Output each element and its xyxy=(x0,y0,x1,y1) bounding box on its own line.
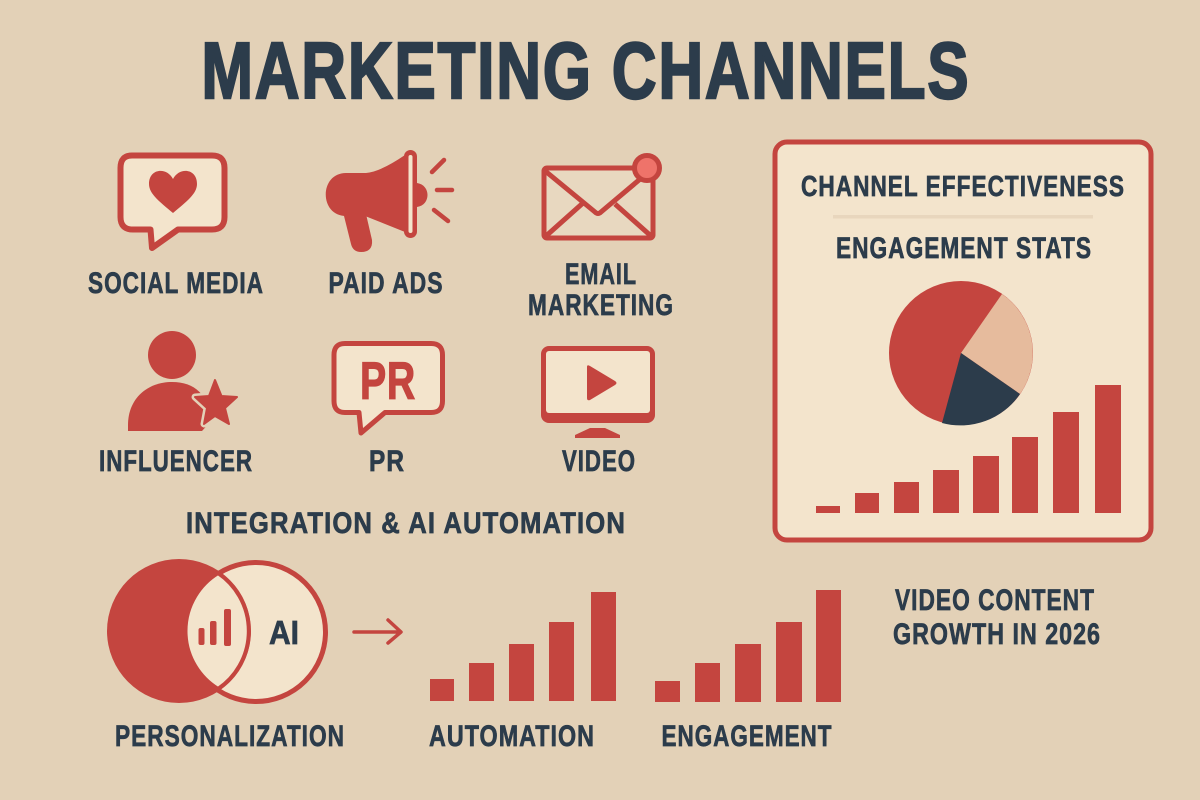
icon: influencer xyxy=(128,331,237,431)
bar chart: automation xyxy=(430,592,616,701)
panel heading: engagement stats: ENGAGEMENT STATS xyxy=(836,232,1092,265)
label: personalization: PERSONALIZATION xyxy=(115,720,345,753)
label: video content growth: VIDEO CONTENT xyxy=(895,584,1095,617)
icon: video monitor xyxy=(541,346,655,438)
label: PR: PR xyxy=(369,445,405,478)
icon: social media xyxy=(120,156,224,248)
icon: PR speech bubble: PR xyxy=(360,352,416,411)
label: social media: SOCIAL MEDIA xyxy=(88,267,264,300)
arrow xyxy=(354,620,401,643)
label: automation: AUTOMATION xyxy=(429,720,595,753)
bar chart: engagement growth xyxy=(655,590,841,702)
label: video: VIDEO xyxy=(562,445,636,478)
icon: PR speech bubble xyxy=(334,344,442,433)
label: video content growth: GROWTH IN 2026 xyxy=(893,618,1101,651)
venn diagram: AI xyxy=(269,614,299,651)
panel: channel effectiveness xyxy=(775,142,1151,540)
heading: integration and AI: INTEGRATION & AI AUTOMATION xyxy=(186,507,626,540)
label: influencer: INFLUENCER xyxy=(99,445,253,478)
venn diagram xyxy=(107,559,326,703)
icon: paid ads megaphone xyxy=(326,150,452,252)
label: email marketing xyxy=(528,258,674,322)
pie chart xyxy=(889,281,1033,425)
label: video content growth xyxy=(893,584,1101,651)
label: paid ads: PAID ADS xyxy=(328,267,444,300)
title: MARKETING CHANNELS xyxy=(202,26,970,115)
label: engagement: ENGAGEMENT xyxy=(662,720,832,753)
label: email marketing: MARKETING xyxy=(528,289,674,322)
label: email marketing: EMAIL xyxy=(565,258,637,291)
icon: email envelope xyxy=(544,156,660,238)
bar chart: engagement xyxy=(816,385,1121,513)
